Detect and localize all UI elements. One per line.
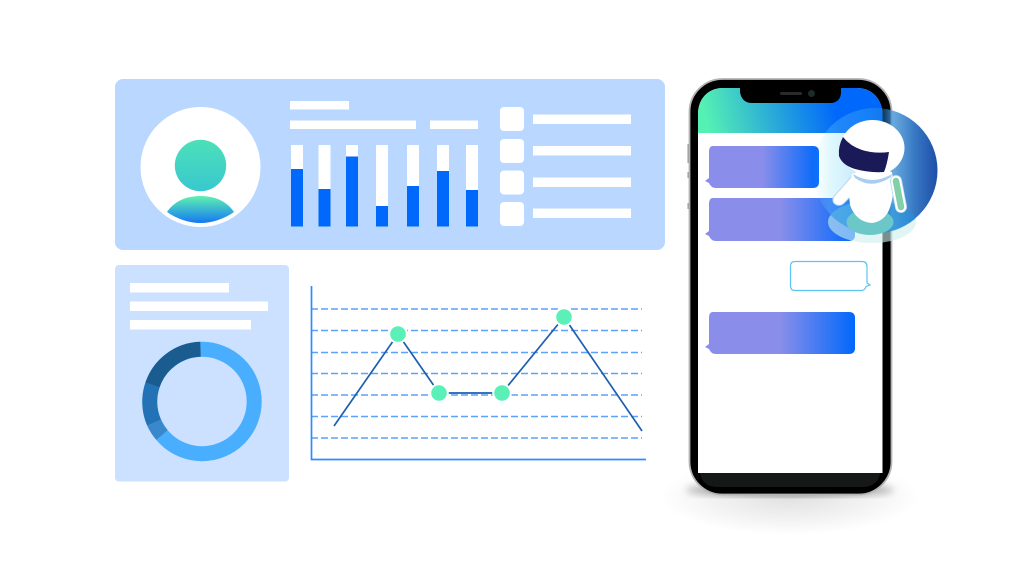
base glow inner bbox=[830, 203, 916, 233]
side buttons bbox=[688, 144, 690, 209]
avatar bbox=[140, 107, 260, 227]
screen bbox=[698, 88, 882, 473]
text lines bbox=[130, 283, 268, 330]
data points bbox=[389, 308, 573, 402]
chat bubble 3 outlined bbox=[790, 262, 870, 290]
bar chart bbox=[291, 145, 478, 226]
panel: donut summary bbox=[115, 265, 289, 482]
panel: profile dashboard bbox=[115, 79, 665, 250]
axes bbox=[312, 286, 646, 460]
phone shadow bbox=[660, 459, 920, 535]
torso bbox=[849, 169, 893, 223]
heading lines bbox=[290, 101, 478, 129]
left arm bbox=[833, 176, 861, 205]
base bbox=[846, 209, 894, 235]
grid lines bbox=[311, 309, 642, 438]
chat bubble 1 bbox=[705, 146, 819, 188]
chat bubble 4 bbox=[705, 312, 855, 354]
phone body bbox=[690, 79, 892, 494]
battery arm bbox=[896, 181, 901, 207]
data line bbox=[334, 317, 642, 431]
chin bbox=[700, 473, 880, 487]
robot assistant bbox=[812, 108, 938, 243]
chat bubble 2 bbox=[705, 198, 855, 241]
base glow outer bbox=[828, 201, 916, 243]
visor bbox=[839, 137, 889, 172]
checklist bbox=[500, 107, 631, 226]
line chart bbox=[311, 286, 646, 460]
donut chart bbox=[150, 349, 254, 454]
notch bbox=[740, 86, 841, 103]
halo sphere bbox=[812, 108, 938, 233]
collar bbox=[853, 174, 892, 184]
phone bbox=[660, 79, 920, 535]
header bbox=[698, 88, 882, 133]
head bbox=[840, 120, 904, 176]
